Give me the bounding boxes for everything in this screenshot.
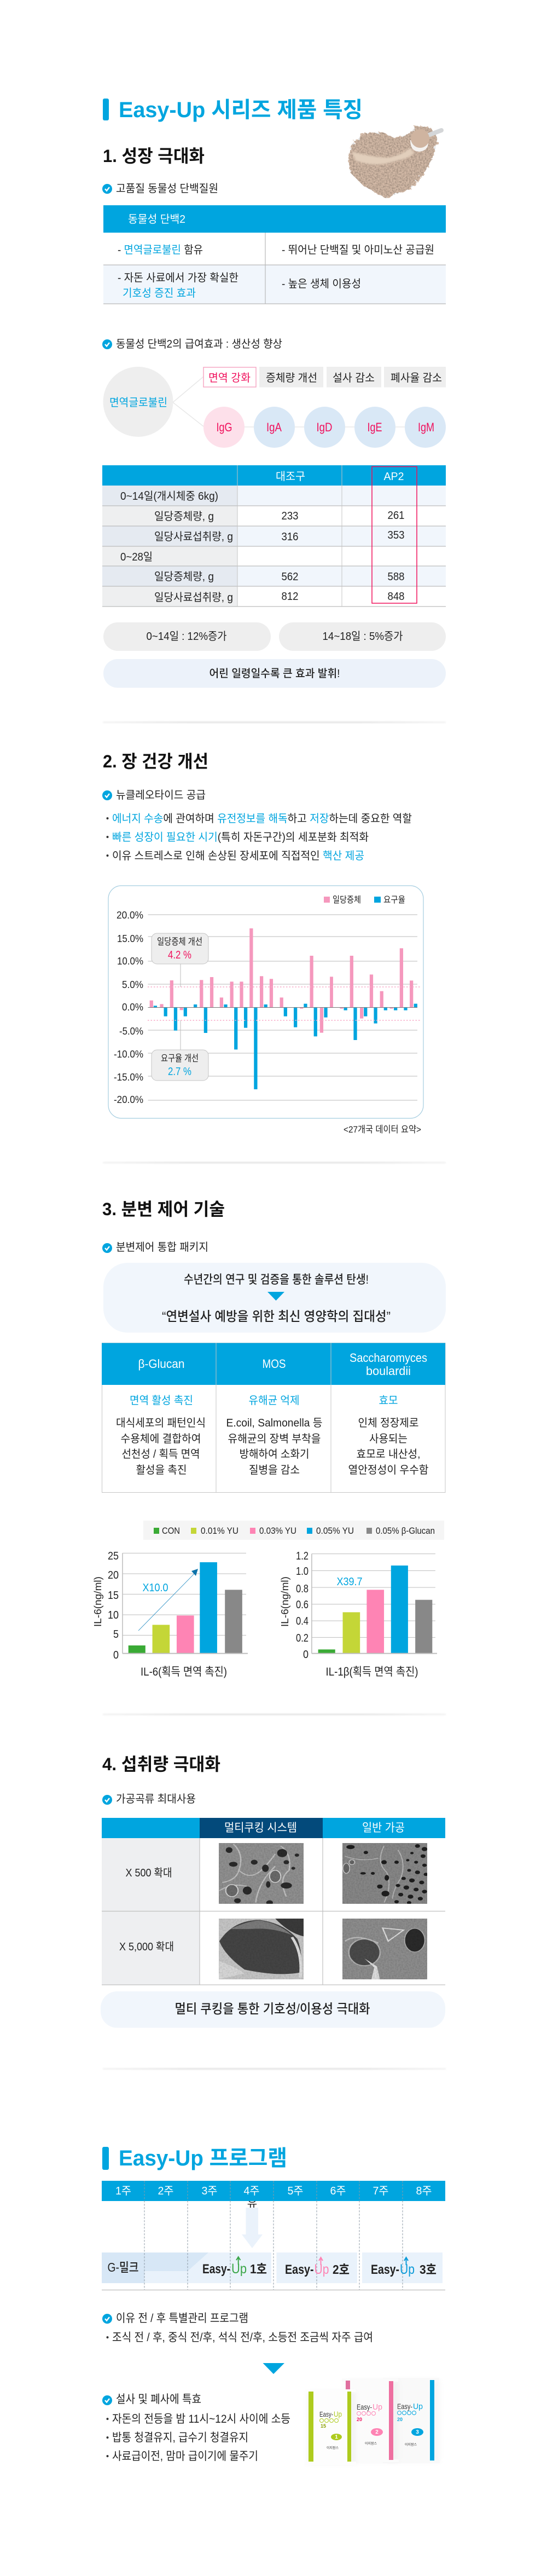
table: SEM comparison: 멀티쿠킹 시스템: [224, 1822, 297, 1834]
image: standard x500: [342, 1843, 428, 1904]
y axis labels: 5.0%: [122, 979, 143, 990]
table: growth performance: 812: [281, 591, 299, 603]
table: growth performance: 261: [387, 510, 405, 522]
logo: Easy-Up 1: Easy-: [202, 2262, 230, 2277]
bar chart: IL-6: 15: [108, 1590, 119, 1602]
week labels: 2주: [158, 2185, 174, 2197]
table: growth performance: 353: [387, 529, 405, 541]
table: growth performance: 일당증체량, g: [154, 570, 214, 583]
chart legend: IL charts: 0.05% YU: [316, 1526, 354, 1536]
week labels: 7주: [373, 2185, 388, 2197]
pill: intake conclusion: 멀티 쿠킹을 통한 기호성/이용성 극대화: [175, 2002, 370, 2017]
bar chart: IL-1 beta: 0: [303, 1649, 309, 1661]
table: three ingredients: 면역 활성 촉진: [130, 1394, 193, 1407]
callout: daily gain 4.2%: [152, 933, 208, 964]
table: three ingredients: 인체 정장제로: [358, 1417, 419, 1429]
logo: Easy-Up 2: Up: [314, 2262, 329, 2277]
table: three ingredients: Saccharomyces: [350, 1351, 427, 1365]
bag 2: 이지팜스: [365, 2441, 377, 2446]
pill: intake conclusion: [101, 1991, 445, 2028]
bar chart: IL-6: 20: [108, 1569, 119, 1581]
table: three ingredients: E.coil, Salmonella 등: [226, 1417, 323, 1429]
bag 3: [383, 2378, 440, 2463]
bag 2: Up: [373, 2402, 382, 2412]
effect tags: 설사 감소: [333, 372, 375, 384]
bag 2: 2: [375, 2429, 379, 2435]
week labels: 6주: [330, 2185, 346, 2197]
logo: Easy-Up 2: [285, 2257, 350, 2277]
table: animal protein 2: [103, 205, 446, 304]
table: three ingredients: 대식세포의 패턴인식: [116, 1417, 206, 1429]
bullet list: nucleotide benefits: 에너지 수송에 관여하며 유전정보를 해독하고 저장하는데 중요한 역할: [112, 812, 412, 825]
bag 1: Up: [334, 2410, 342, 2418]
chart legend: IL charts: 0.05% β-Glucan: [376, 1526, 435, 1536]
week labels: 5주: [288, 2185, 303, 2197]
bar chart: IL-1 beta: 0.2: [296, 1632, 309, 1644]
chart legend: IL charts: 0.01% YU: [201, 1526, 238, 1536]
timeline: 8 week program: G-밀크: [107, 2260, 139, 2274]
image: three product bags: [305, 2378, 440, 2465]
check item: feeding effect: 동물성 단백2의 급여효과 : 생산성 향상: [116, 338, 282, 350]
bullet: feeding schedule: 조식 전 / 후, 중식 전/후, 석식 전/후, 소등전 조금씩 자주 급여: [112, 2331, 373, 2344]
table: growth performance: AP2: [384, 471, 404, 483]
logo: Easy-Up 3: [371, 2257, 437, 2277]
table: growth performance: 0~28일: [120, 551, 153, 563]
table: three ingredients: β-Glucan: [138, 1357, 185, 1371]
check item: premium animal protein: 고품질 동물성 단백질원: [116, 182, 218, 195]
table: animal protein 2: 동물성 단백2: [128, 213, 185, 226]
bar chart: IL-1 beta: [280, 1550, 437, 1678]
antibody circles: IgG: [217, 420, 232, 434]
bars: feed conversion: [154, 1004, 417, 1089]
table: growth performance: 일당증체량, g: [154, 510, 214, 523]
table: three ingredients: 활성을 촉진: [136, 1464, 187, 1476]
table: three ingredients: 방해하여 소화기: [240, 1448, 310, 1460]
bars: daily gain: [150, 928, 413, 1033]
logo: Easy-Up 3: 3호: [420, 2262, 437, 2277]
table: growth performance: 588: [387, 571, 405, 583]
bullet list: management tips: 사료급이전, 맘마 급이기에 물주기: [112, 2450, 258, 2463]
week labels: 4주: [244, 2185, 259, 2197]
heading: 1 growth: 1. 성장 극대화: [103, 146, 205, 166]
bullet list: management tips: 밥통 청결유지, 급수기 청결유지: [112, 2431, 248, 2444]
bar chart: IL-6: 0: [113, 1649, 119, 1661]
bullet list: nucleotide benefits: [106, 812, 412, 862]
callout: feed conversion 2.7%: 요구율 개선: [161, 1053, 199, 1064]
arrow: weaning: [242, 2208, 263, 2248]
image: multi cooking x5000: [219, 1919, 304, 1979]
week labels: 3주: [201, 2185, 218, 2197]
bar chart: IL-1 beta: 0.6: [296, 1599, 309, 1611]
table: growth performance: [102, 465, 446, 607]
title: Easy-Up program: Easy-Up 프로그램: [119, 2146, 287, 2170]
table: growth performance: 562: [281, 571, 299, 583]
table: three ingredients: 사용되는: [369, 1433, 408, 1445]
chart legend: IL charts: [143, 1521, 444, 1540]
y axis labels: [114, 910, 143, 1105]
week labels: 8주: [416, 2185, 432, 2197]
bag 1: 1: [335, 2434, 338, 2440]
bag 3: Easy-: [397, 2402, 412, 2411]
diagram: immunoglobulin: [103, 367, 446, 448]
antibody circles: IgA: [266, 420, 282, 434]
bag 1: 이지팜스: [327, 2446, 339, 2450]
image: multi cooking x500: [219, 1843, 304, 1905]
chart legend: IL charts: 0.03% YU: [259, 1526, 296, 1536]
table: three ingredients: 질병을 감소: [249, 1464, 300, 1476]
bag 2: [342, 2378, 399, 2462]
callout: feed conversion 2.7%: 2.7 %: [168, 1066, 191, 1078]
logo: Easy-Up 3: Up: [400, 2262, 415, 2277]
y axis labels: -15.0%: [114, 1072, 143, 1083]
bar chart: IL-6: IL-6(획득 면역 촉진): [141, 1666, 227, 1678]
table: animal protein 2: - 뛰어난 단백질 및 아미노산 공급원: [282, 244, 434, 256]
bar chart: IL-1 beta: IL-1β(획득 면역 촉진): [326, 1666, 418, 1678]
table: SEM comparison: [102, 1818, 445, 1985]
logo: Easy-Up 2: 2호: [333, 2262, 350, 2277]
bullet list: management tips: 자돈의 전등을 밤 11시~12시 사이에 소등: [112, 2413, 290, 2425]
antibody circles: IgD: [316, 420, 333, 434]
y axis labels: -20.0%: [114, 1094, 143, 1105]
bar chart: IL-1 beta: 1.0: [296, 1566, 309, 1578]
heading: 2 gut health: 2. 장 건강 개선: [103, 752, 208, 771]
pill: conclusion: [103, 659, 446, 688]
table: growth performance: 233: [281, 510, 299, 522]
bullet list: nucleotide benefits: 빠른 성장이 필요한 시기(특히 자돈구간)의 세포분화 최적화: [112, 831, 369, 844]
antibody circles: IgM: [418, 420, 434, 434]
bag 2: 20: [357, 2417, 362, 2422]
antibody circles: [203, 407, 446, 448]
table: growth performance: 일당사료섭취량, g: [154, 530, 233, 543]
table: growth performance: 0~14일(개시체중 6kg): [120, 490, 218, 503]
bag 3: 20: [397, 2417, 403, 2422]
table: SEM comparison: X 500 확대: [126, 1867, 172, 1879]
table: three ingredients: 유해균의 장벽 부착을: [228, 1433, 321, 1445]
table: growth performance: 316: [281, 531, 299, 543]
table: animal protein 2: - 높은 생체 이용성: [282, 278, 361, 290]
logo: Easy-Up 2: Easy-: [285, 2262, 314, 2277]
check item: fecal control package: 분변제어 통합 패키지: [116, 1241, 208, 1254]
chart panel: 27 country bars: [108, 886, 423, 1118]
table: SEM comparison: 일반 가공: [362, 1822, 405, 1834]
chart legend: [324, 895, 405, 905]
bar chart: IL-1 beta: 1.2: [296, 1550, 309, 1562]
week labels: 1주: [115, 2185, 131, 2197]
arrow down: [267, 1292, 284, 1301]
heading: 4 intake: 4. 섭취량 극대화: [102, 1754, 220, 1774]
table: three ingredients: [102, 1343, 445, 1492]
image: standard x5000: [342, 1919, 427, 1979]
pill: day 14-18 result: [279, 622, 446, 651]
check item: processed grains: 가공곡류 최대사용: [116, 1793, 196, 1805]
effect tags: 폐사율 감소: [391, 372, 442, 384]
table: three ingredients: 유해균 억제: [248, 1394, 300, 1407]
chart legend: 요구율: [383, 896, 405, 905]
pill: day 0-14 result: [103, 622, 271, 651]
effect tags: 면역 강화: [208, 372, 251, 384]
callout: daily gain 4.2%: 일당증체 개선: [157, 937, 202, 947]
bar chart: IL-6: [92, 1550, 248, 1678]
bar chart: IL-1 beta: IL-6(ng/ml): [280, 1576, 290, 1627]
table: three ingredients: 효모로 내산성,: [357, 1448, 420, 1460]
table: animal protein 2: 기호성 증진 효과: [123, 287, 196, 299]
y axis labels: 10.0%: [117, 956, 143, 967]
bar chart: IL-6: 10: [108, 1609, 119, 1621]
logo: Easy-Up 1: 1호: [250, 2262, 267, 2276]
table: three ingredients: MOS: [263, 1357, 286, 1371]
table: three ingredients: 효모: [379, 1395, 398, 1407]
pill: day 0-14 result: 0~14일 : 12%증가: [147, 630, 226, 643]
y axis labels: 15.0%: [117, 933, 143, 944]
bar chart: IL-6: 25: [108, 1550, 119, 1562]
y axis labels: 20.0%: [117, 910, 143, 921]
arrow down: [263, 2363, 284, 2374]
table: growth performance: 848: [387, 591, 405, 603]
callout panel: research solution: [103, 1263, 446, 1332]
bullet list: nucleotide benefits: 이유 스트레스로 인해 손상된 장세포에 직접적인 핵산 제공: [112, 850, 364, 862]
table: growth performance: 대조구: [276, 470, 305, 483]
table: animal protein 2: - 면역글로불린 함유: [118, 244, 203, 256]
image: protein powder with scoop: [348, 126, 441, 198]
callout panel: research solution: “연변설사 예방을 위한 최신 영양학의 집대성”: [162, 1309, 391, 1324]
arrow: growth: [138, 1569, 198, 1631]
y axis labels: 0.0%: [122, 1002, 143, 1013]
callout: feed conversion 2.7%: [152, 1050, 208, 1081]
chart legend: IL charts: CON: [162, 1526, 180, 1536]
check item: nucleotide supply: 뉴클레오타이드 공급: [116, 789, 206, 801]
product bars: [102, 2252, 443, 2283]
diagram: immunoglobulin: 면역글로불린: [109, 396, 167, 409]
table: three ingredients: 수용체에 결합하여: [120, 1433, 201, 1445]
title: Easy-Up series features: Easy-Up 시리즈 제품 특징: [119, 98, 363, 122]
check item: weaning management: 이유 전 / 후 특별관리 프로그램: [116, 2312, 248, 2325]
bag 2: Easy-: [357, 2402, 372, 2411]
bag 3: 이지팜스: [405, 2442, 417, 2447]
antibody circles: IgE: [368, 420, 382, 434]
y axis labels: -5.0%: [119, 1026, 143, 1037]
table: SEM comparison: X 5,000 확대: [119, 1940, 174, 1953]
pill: day 14-18 result: 14~18일 : 5%증가: [323, 630, 403, 643]
logo: Easy-Up 1: Up: [231, 2261, 247, 2277]
bullet list: management tips: [106, 2413, 290, 2463]
timeline: 8 week program: 유: [247, 2198, 257, 2210]
bag 3: 3: [416, 2429, 419, 2435]
y axis labels: -10.0%: [114, 1049, 143, 1060]
timeline: 8 week program: [102, 2181, 445, 2290]
bar chart: IL-6: IL-6(ng/ml): [92, 1576, 103, 1627]
bar chart: IL-1 beta: X39.7: [337, 1576, 362, 1588]
bar chart: IL-6: 5: [113, 1628, 119, 1641]
table: growth performance: 일당사료섭취량, g: [154, 591, 233, 604]
check item: diarrhea treatment: 설사 및 폐사에 특효: [116, 2393, 201, 2406]
table: three ingredients: boulardii: [366, 1364, 411, 1378]
bar chart: IL-1 beta: 0.4: [296, 1615, 309, 1627]
week labels: [115, 2185, 432, 2197]
chart legend: 일당증체: [333, 895, 361, 905]
callout panel: research solution: 수년간의 연구 및 검증을 통한 솔루션 탄생!: [184, 1273, 369, 1286]
bag 1: Easy-: [319, 2410, 333, 2418]
bar chart: IL-6: X10.0: [142, 1582, 168, 1594]
logo: Easy-Up 3: Easy-: [371, 2262, 399, 2277]
bar chart: IL-1 beta: 0.8: [296, 1583, 309, 1595]
effect tags: 증체량 개선: [266, 372, 317, 384]
heading: 3 fecal control: 3. 분변 제어 기술: [102, 1199, 225, 1219]
logo: Easy-Up 1: [202, 2257, 267, 2277]
highlight: AP2 column: [372, 466, 417, 603]
bag 1: [305, 2389, 356, 2465]
bag 1: 15: [321, 2423, 326, 2429]
effect tags: [203, 367, 446, 388]
table: three ingredients: 열안정성이 우수함: [348, 1464, 429, 1476]
chart caption: <27개국 데이터 요약>: [344, 1124, 421, 1135]
pill: conclusion: 어린 일령일수록 큰 효과 발휘!: [209, 667, 340, 680]
callout: daily gain 4.2%: 4.2 %: [168, 949, 191, 961]
table: three ingredients: 선천성 / 획득 면역: [121, 1448, 200, 1460]
bag 3: Up: [413, 2402, 423, 2411]
table: animal protein 2: - 자돈 사료에서 가장 확실한: [118, 272, 238, 284]
